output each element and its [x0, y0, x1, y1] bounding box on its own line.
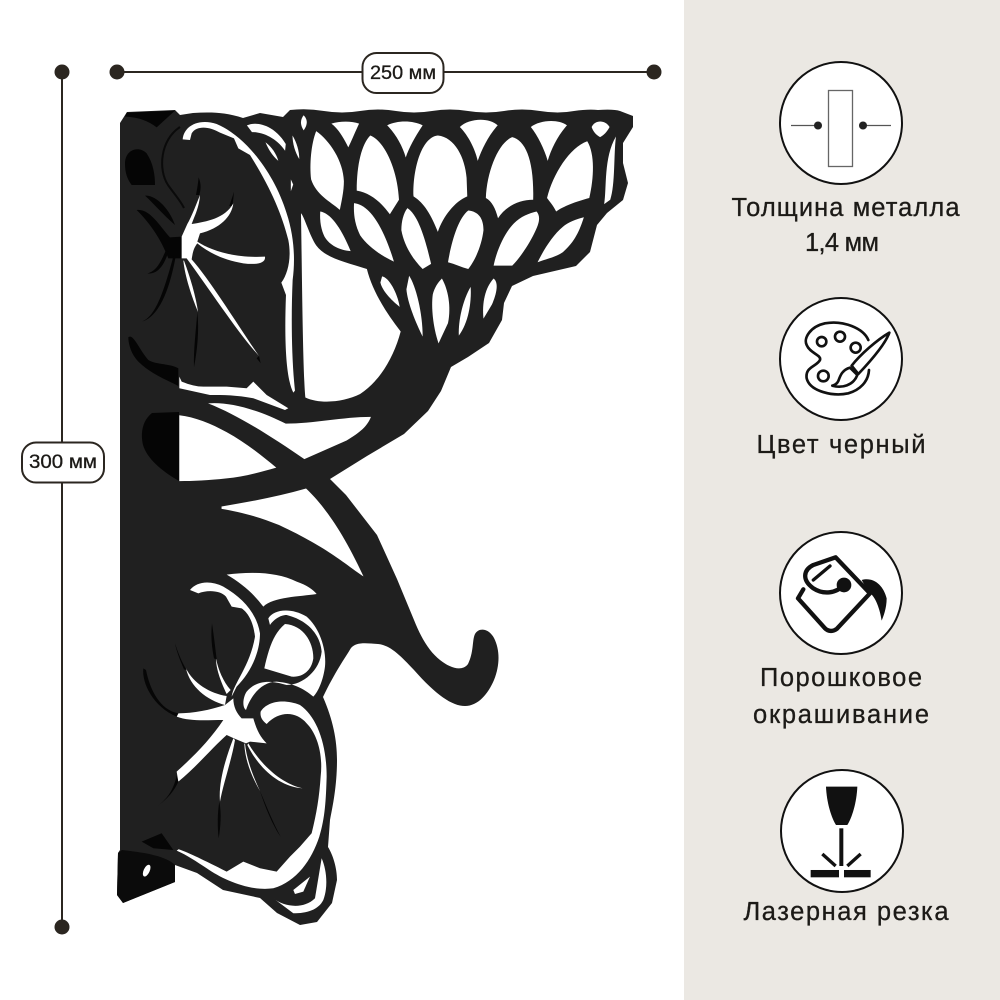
cutout: mounting hole	[141, 864, 152, 878]
slot: left crescent	[143, 668, 178, 717]
icon: laser cutting	[781, 770, 903, 892]
cutouts: top-left small slits	[247, 124, 286, 151]
cutouts: bottom lens row	[380, 276, 400, 307]
window shadow slot	[142, 412, 179, 481]
dark slots: lower flower	[142, 623, 281, 850]
cutout: bottom arc	[273, 858, 326, 913]
cutout: flower top band	[190, 583, 260, 697]
ring arc on the mounting plate	[162, 127, 184, 208]
cutout: ring outer band	[243, 610, 325, 710]
feature: black colour	[756, 298, 926, 459]
text: powder coating line 1: Порошковое	[760, 664, 922, 692]
text: black colour: Цвет черный	[756, 431, 926, 459]
cutout: crescent above flower	[227, 573, 317, 607]
dark shaded slots on the mounting plate	[125, 111, 261, 386]
icon: paint bucket	[780, 532, 902, 654]
cutouts: middle petal row	[320, 212, 351, 251]
slot: lower veins	[218, 802, 221, 838]
label: 300 mm	[22, 442, 104, 482]
cutouts: big petal row	[310, 131, 344, 210]
cutouts: lower flower	[141, 573, 327, 913]
cutout: window	[179, 415, 276, 481]
text: 1.4 mm: 1,4 мм	[805, 229, 879, 257]
cutouts: top row of net cells	[331, 122, 359, 147]
slot: thin root strokes	[147, 250, 168, 273]
feature: laser cutting	[744, 770, 949, 926]
slot: arch	[125, 149, 155, 185]
dimension: height 300 mm	[22, 64, 104, 934]
cutout: lower flower edge	[179, 377, 288, 410]
cutout: vein arms	[186, 668, 227, 705]
cutouts: upper flower	[179, 122, 295, 410]
cutout: flower star	[182, 195, 265, 356]
cutout: ring interior	[264, 624, 313, 677]
cutout: thin vein	[183, 261, 198, 312]
slot: flower root	[137, 210, 182, 258]
cutout: flower outline band	[183, 122, 295, 393]
label: 300 mm: 300 мм	[29, 452, 97, 473]
slot: tail	[150, 775, 178, 811]
cutout: lower wing	[222, 489, 364, 576]
icon: palette	[780, 298, 902, 420]
label: 250 mm	[362, 53, 444, 93]
bracket product illustration	[117, 109, 633, 925]
slot: corner notch	[125, 111, 175, 127]
text: powder coating line 2: окрашивание	[753, 701, 929, 729]
text: metal thickness: Толщина металла	[732, 194, 960, 222]
text: laser cutting: Лазерная резка	[744, 898, 949, 926]
slot: lower crescent	[128, 337, 178, 386]
cutouts: net section	[247, 115, 616, 402]
slot: bottom notch	[142, 833, 173, 850]
feature: metal thickness	[732, 62, 960, 257]
cutout: star centre	[177, 698, 267, 782]
cutout: wing slit	[208, 403, 371, 459]
bottom mounting tab	[117, 850, 175, 903]
cutout: large moon opening	[301, 213, 401, 402]
cutout: lower petal band	[177, 702, 327, 889]
cutout: small leaf	[293, 877, 310, 894]
bracket silhouette	[117, 109, 633, 925]
label: 250 mm: 250 мм	[370, 63, 436, 84]
cutouts: middle section	[179, 403, 371, 576]
slot: arm tips	[175, 643, 187, 670]
dimension: width 250 mm	[110, 53, 662, 93]
slot: upper vein band	[145, 196, 175, 225]
right side panel background	[684, 0, 1000, 1000]
feature: powder coating	[753, 532, 929, 729]
slot: vein tips	[196, 177, 201, 195]
icon: metal thickness	[780, 62, 902, 184]
